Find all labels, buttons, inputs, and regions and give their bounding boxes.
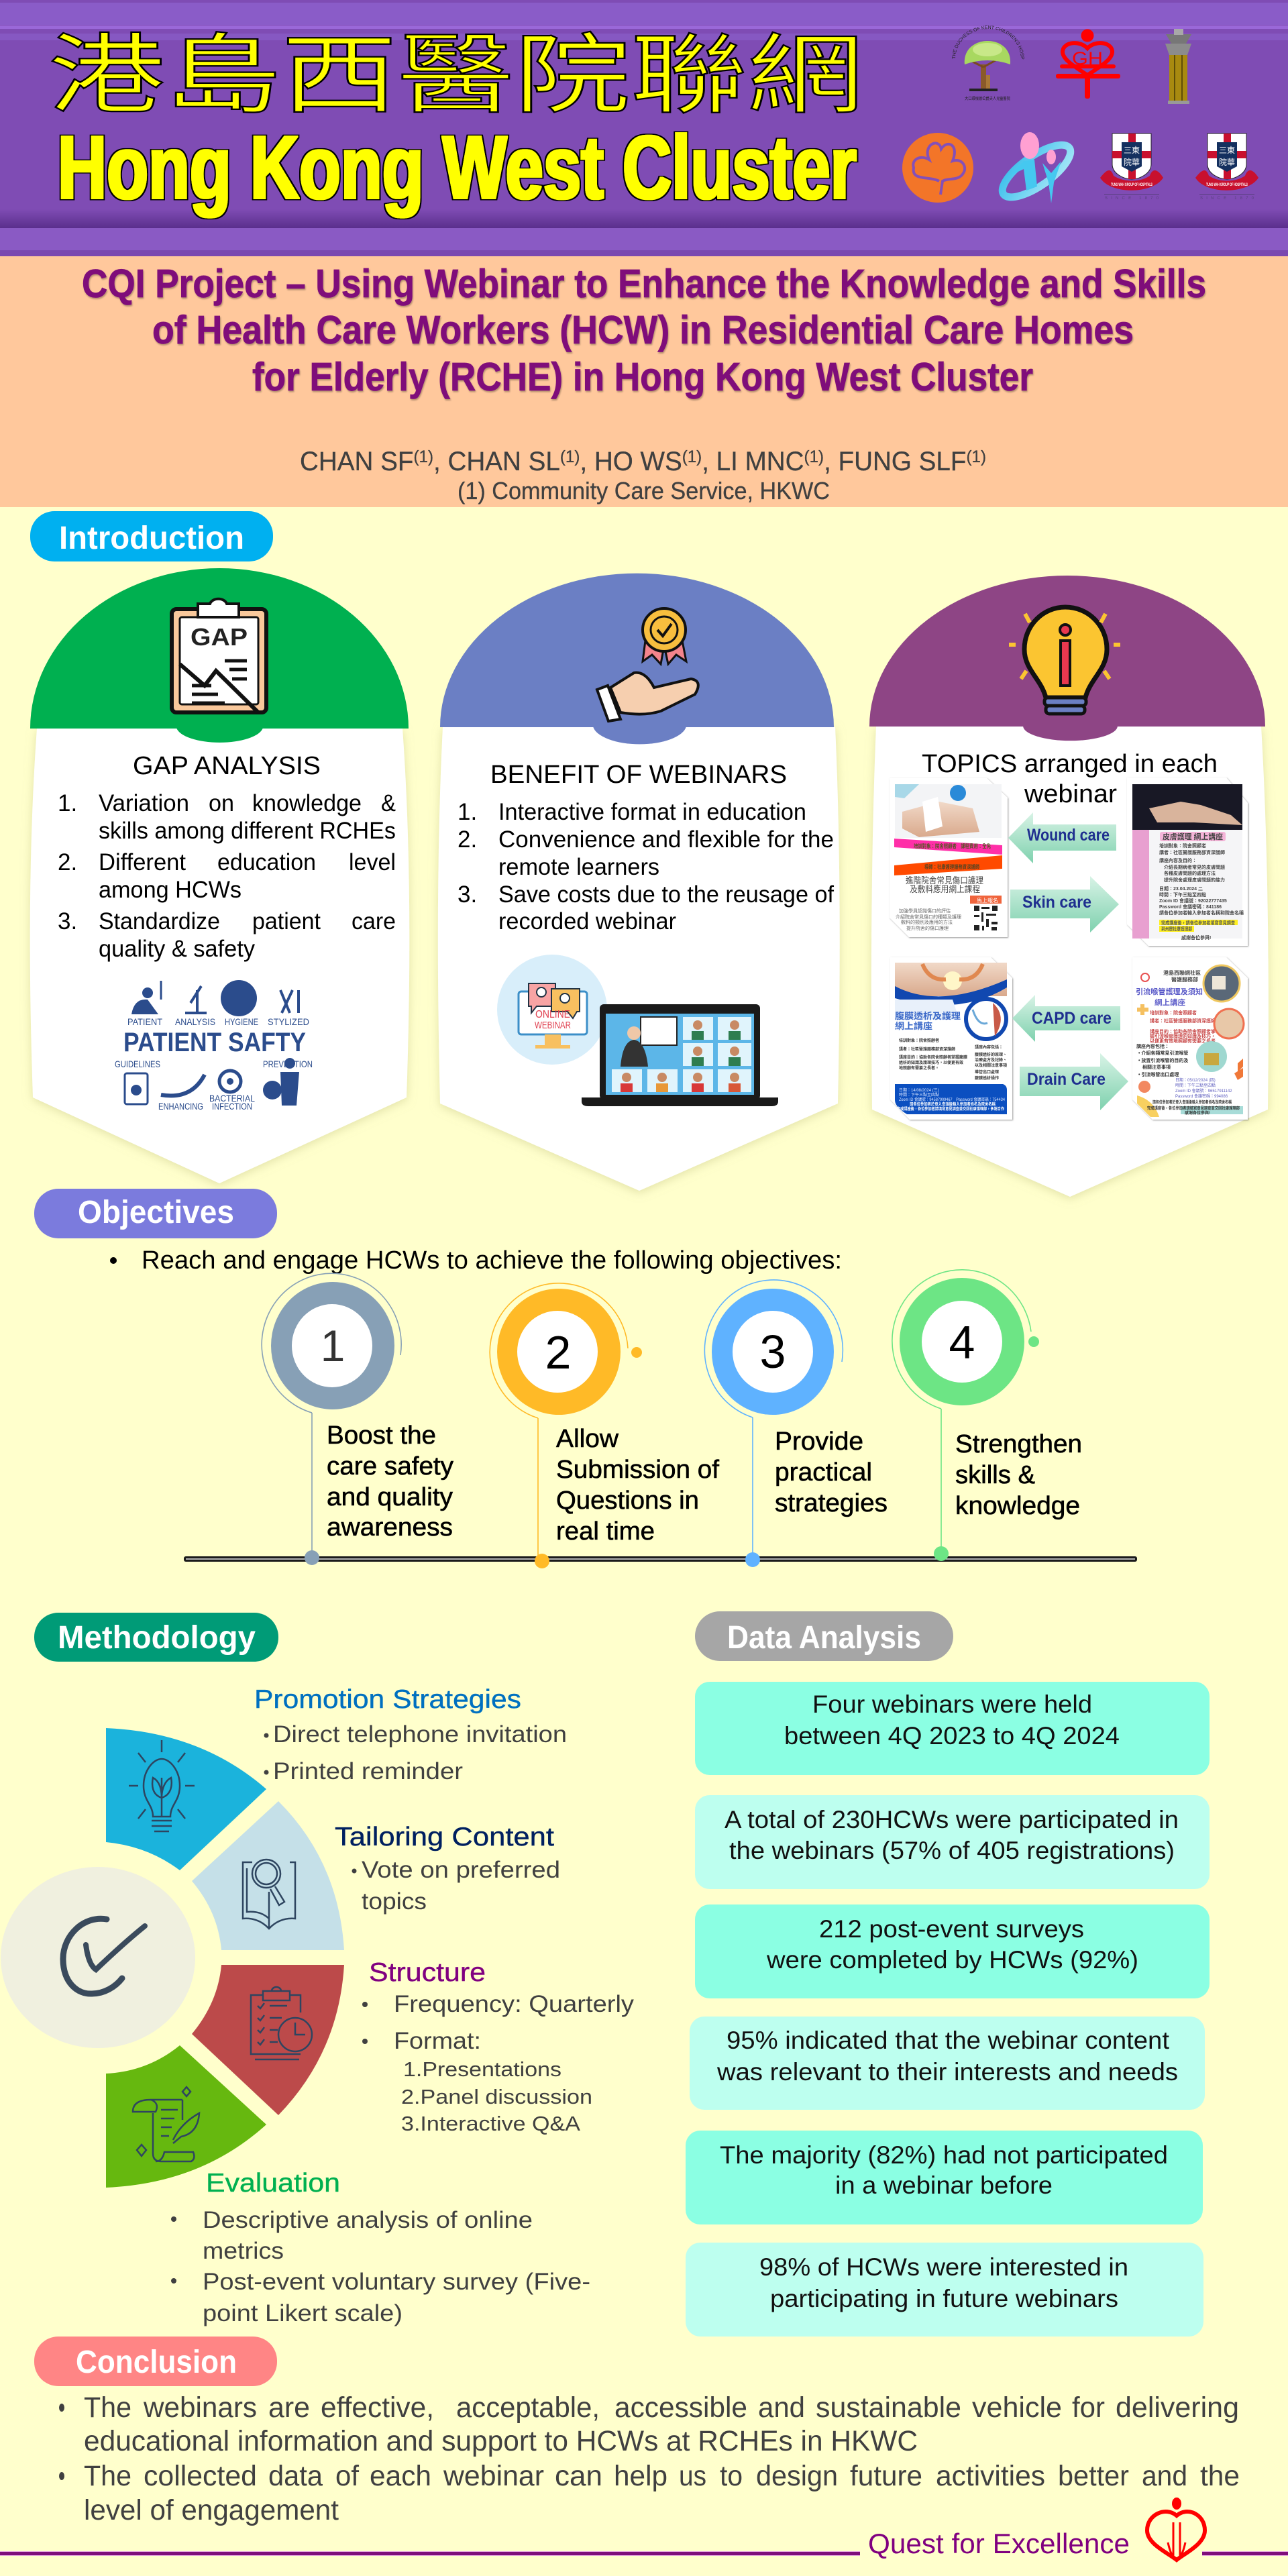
data box 6 [686, 2243, 1203, 2337]
heading: Objectives [34, 1189, 277, 1238]
authors: (1) [560, 447, 580, 466]
poster: drain care: 相關注意事項 [1142, 1064, 1171, 1070]
objective 1: and quality [327, 1483, 453, 1511]
logo: Tung Wah shield 1: SINCE 1870 [1105, 197, 1159, 201]
poster: drain care: 培訓對象：院舍照顧者 [1150, 1010, 1197, 1016]
poster: drain care: 完成講座後，各位參加者請填寫意見調查並交回社康護理部 [1147, 1106, 1240, 1111]
sector: tailoring [192, 1801, 344, 1950]
poster: skin care: 各種皮膚問題的處理方法 [1164, 870, 1216, 876]
data box 2: A total of 230HCWs were participated in [724, 1806, 1179, 1833]
authors: (1) [414, 447, 433, 466]
conclusion text: collected [144, 2460, 257, 2492]
logo: Tung Wah shield 1: 三東 [1124, 146, 1140, 155]
heading: Methodology [34, 1613, 278, 1662]
objective 4 [892, 1270, 1082, 1561]
poster: wound care: 培訓對象：院舍照顧者 課程費用：全免 [914, 843, 991, 849]
objective 1: 1 [321, 1321, 345, 1371]
poster: wound care: 及敷料應用網上課程 [910, 884, 980, 894]
data box 2 [695, 1795, 1210, 1889]
objective 1 [262, 1273, 453, 1565]
text: evaluation [171, 2169, 590, 2326]
conclusion text: better [1058, 2460, 1129, 2492]
poster: capd care: 網上講座 [895, 1021, 932, 1031]
gap analysis list: quality & safety [99, 936, 255, 962]
icon: gap clipboard [172, 599, 266, 712]
poster: drain care: 港島西聯網社區 [1163, 969, 1201, 976]
text: structure: 1.Presentations [403, 2057, 561, 2081]
logo: Duchess of Kent tree: 大口環根德公爵夫人兒童醫院 [965, 96, 1010, 101]
illustration: patient safety: STYLIZED [268, 1016, 309, 1027]
poster: capd care: 腹膜透析操作 [975, 1075, 999, 1081]
benefit list: 3. [458, 881, 477, 908]
poster: capd care: 完成講座後，各位參加者請填寫意見調查並交回社康護理部，多謝合作 [897, 1106, 1004, 1112]
poster: skin care: 完成講座後，請各位參加者填寫意見調查 [1161, 920, 1235, 926]
illustration: patient safety: PREVENTION [263, 1059, 313, 1069]
heading: topics: TOPICS arranged in each [922, 750, 1218, 778]
objective 2: 2 [545, 1326, 571, 1379]
data box 1: between 4Q 2023 to 4Q 2024 [784, 1722, 1120, 1750]
gap analysis list: Variation [99, 790, 189, 816]
footer slogan: Quest for Excellence [868, 2528, 1130, 2559]
poster: wound care: 提升院舍的傷口護理 [906, 925, 949, 931]
project title: for Elderly (RCHE) in Hong Kong West Cluster [252, 355, 1033, 399]
affiliation: (1) Community Care Service, HKWC [458, 477, 830, 504]
logo: Tung Wah shield 2: SINCE 1870 [1200, 197, 1254, 201]
conclusion text: each [370, 2460, 431, 2492]
text: tailoring content: Vote on preferred [362, 1857, 560, 1883]
text: promotion strategies [254, 1685, 567, 1784]
gap analysis list: 1. [58, 790, 77, 816]
data box 5: The majority (82%) had not participated [720, 2141, 1168, 2169]
poster: skin care: 講者：社區醫護服務部資深護師 [1159, 849, 1225, 855]
heading: Introduction: Introduction [59, 521, 244, 556]
illustration: patient safety [115, 980, 313, 1112]
poster: capd care: 日期：14/08/2024 (三) [899, 1087, 939, 1093]
poster: drain care: 請各位參加者於登入會議後輸入參加者姓名及院舍名稱 [1152, 1099, 1232, 1105]
text: evaluation: Evaluation [206, 2169, 340, 2198]
data box 6: participating in future webinars [770, 2285, 1118, 2312]
objective 3: practical [775, 1458, 872, 1487]
sector: promotion [106, 1728, 266, 1870]
text: evaluation: Descriptive analysis of online [203, 2207, 533, 2233]
authors: (1) [682, 447, 702, 466]
text: structure: 2.Panel discussion [401, 2085, 592, 2108]
objective 4: knowledge [955, 1492, 1080, 1520]
conclusion text: help [614, 2460, 667, 2492]
logo: Grantham Hospital [1056, 30, 1120, 99]
gap analysis list: Standardize [99, 908, 220, 934]
illustration: online webinar [497, 955, 778, 1106]
poster: capd care: 時間：下午三點至四點 [899, 1092, 939, 1097]
gap analysis list: care [352, 908, 396, 934]
project title: of Health Care Workers (HCW) in Residential Care Homes [152, 308, 1134, 352]
benefit list: recorded webinar [498, 908, 676, 934]
conclusion text: effective, [321, 2392, 434, 2424]
poster: drain care: 講座目的：協助各院舍照顧者掌 [1150, 1028, 1216, 1034]
panel: topics [869, 576, 1269, 1197]
chinese title: 港島西醫院聯網 [48, 26, 863, 124]
objective 4: 4 [949, 1316, 975, 1368]
text: tailoring content [335, 1823, 560, 1915]
heading: Introduction [30, 511, 273, 561]
conclusion text: webinar [443, 2460, 544, 2492]
benefit list: Interactive format in education [498, 799, 806, 825]
benefit list: 2. [458, 826, 477, 853]
gap analysis list: on [209, 790, 234, 816]
gap analysis list: Different [99, 849, 186, 875]
authors: (1) [966, 447, 986, 466]
poster: drain care: 醫護服務部 [1171, 976, 1198, 983]
project title [82, 262, 1206, 399]
poster: capd care: 講者：社區醫護服務部資深護師 [899, 1046, 955, 1052]
poster: skin care: 提升院舍處理皮膚問題的能力 [1164, 877, 1225, 883]
objective 4: skills & [955, 1461, 1035, 1489]
gap analysis list: 2. [58, 849, 77, 875]
text: structure [362, 1958, 635, 2135]
poster: skin care: 日期：23.04.2024 二 [1159, 885, 1203, 892]
poster: drain care [1132, 957, 1248, 1120]
data box 5: in a webinar before [835, 2171, 1053, 2199]
objective 4: Strengthen [955, 1430, 1082, 1458]
poster: skin care: 請各位參加者輸入參加者名稱和院舍名稱 [1159, 910, 1244, 916]
poster: drain care: Zoom ID 會議號：96517911142 [1175, 1088, 1232, 1093]
poster: skin care [1127, 777, 1248, 946]
poster: drain care: • 放置引流喉管的目的及 [1138, 1057, 1188, 1063]
conclusion text: and [758, 2392, 805, 2424]
poster: wound care: 介紹院舍常見傷口的種類及護理 [896, 914, 961, 920]
logo: Tung Wah shield 2: 三東 [1219, 146, 1235, 155]
text: evaluation: Post-event voluntary survey (Five- [203, 2269, 590, 2295]
poster: capd care: Zoom ID 會議號：94587909467 Password 會議密碼：754434 [899, 1097, 1006, 1102]
logo: Tung Wah shield 2 [1195, 133, 1258, 201]
poster: drain care: 網上講座 [1155, 998, 1185, 1007]
text: structure: Format: [394, 2028, 481, 2054]
objective 2: real time [556, 1517, 655, 1546]
data box 4: 95% indicated that the webinar content [727, 2027, 1170, 2054]
data box 3 [695, 1904, 1210, 1998]
poster: capd care: 導管出口處理 [975, 1069, 999, 1075]
poster: capd care: 培訓對象：院舍照顧者 [899, 1038, 939, 1043]
benefit list: 1. [458, 799, 477, 825]
methodology diagram [1, 1728, 344, 2188]
poster: wound care: 導師：社康護理服務資深護師 [924, 863, 979, 870]
objective 1: awareness [327, 1513, 453, 1542]
panel: topics: webinar [1024, 780, 1117, 808]
conclusion text: The [84, 2392, 131, 2424]
text: evaluation: metrics [203, 2238, 284, 2264]
authors: CHAN SF [300, 447, 418, 476]
logo: Duchess of Kent tree [952, 25, 1024, 101]
illustration: patient safety: ENHANCING [158, 1101, 203, 1112]
authors: , HO WS [580, 447, 682, 476]
footer rule [0, 2551, 1288, 2556]
icon: gap clipboard: GAP [191, 623, 248, 651]
project title panel [0, 256, 1288, 507]
logo: Grantham Hospital: GH [1072, 48, 1103, 68]
objective 2: Questions in [556, 1487, 699, 1515]
text: structure: 3.Interactive Q&A [401, 2112, 580, 2135]
illustration: patient safety: ANALYSIS [175, 1016, 215, 1027]
conclusion text: are [268, 2392, 310, 2424]
text: promotion strategies: Direct telephone invitation [273, 1721, 567, 1748]
objective 3: Provide [775, 1428, 863, 1456]
header banner [0, 0, 1288, 256]
poster: skin care: 講座內容及目的： [1159, 857, 1197, 863]
data box 4: was relevant to their interests and needs [716, 2058, 1178, 2086]
logo: caring figure [995, 132, 1078, 206]
data box 4 [690, 2017, 1205, 2110]
conclusion text: educational information and support to HCWs at RCHEs in HKWC [84, 2425, 918, 2457]
benefit list: Save costs due to the reusage of [498, 881, 834, 908]
poster: skin care: 介紹長期病者常見的皮膚問題 [1164, 864, 1225, 870]
objective 3 [704, 1280, 888, 1567]
arrow: skin care: Skin care [1022, 893, 1091, 912]
poster: wound care: 敷料的類別及應用的方法 [901, 919, 953, 925]
poster: drain care: 感謝各位參與! [1185, 1110, 1210, 1116]
conclusion text: can [555, 2460, 602, 2492]
gap analysis list: knowledge [252, 790, 362, 816]
objective 3: strategies [775, 1489, 888, 1517]
icon: hospital authority logo [1147, 2498, 1205, 2560]
arrow: skin care [1010, 876, 1119, 932]
panel: gap analysis [30, 568, 409, 1183]
text: structure: Structure [369, 1958, 486, 1987]
illustration: patient safety: GUIDELINES [115, 1059, 160, 1069]
poster: capd care: 腹膜透析及護理 [895, 1011, 961, 1021]
logo: Tung Wah shield 2: TUNG WAH GROUP OF HOSPITALS [1206, 183, 1248, 187]
poster: capd care [890, 957, 1012, 1120]
icon: medal and hand [597, 608, 698, 721]
heading: Objectives: Objectives [78, 1195, 234, 1230]
illustration: patient safety: PATIENT [127, 1016, 162, 1027]
illustration: patient safety: PATIENT SAFTY [123, 1028, 306, 1057]
poster: capd care: 講座內容包括： [975, 1044, 1003, 1050]
arrow: drain care [1020, 1053, 1128, 1110]
poster: drain care: • 引流喉管出口處理 [1138, 1071, 1179, 1077]
conclusion text: us [679, 2460, 706, 2492]
data box 5 [686, 2131, 1203, 2224]
poster: wound care: 加強學員認識傷口的評估 [899, 908, 951, 914]
objective 2: Allow [556, 1425, 619, 1453]
heading: Conclusion: Conclusion [76, 2345, 237, 2380]
data box 3: were completed by HCWs (92%) [766, 1946, 1138, 1974]
poster: skin care: 時間：下午三點至四點 [1159, 892, 1206, 898]
english title: Hong Kong West Cluster [58, 117, 857, 218]
poster: capd care: 以及相關注意事項 [975, 1063, 1007, 1068]
conclusion text: for [1072, 2392, 1105, 2424]
arrow: drain care: Drain Care [1027, 1070, 1106, 1089]
poster: capd care: 腹膜透析的原理、 [975, 1052, 1007, 1057]
poster: drain care: 講座內容包括： [1136, 1043, 1169, 1049]
poster: capd care: 講座目的：協助各院舍照顧者掌握腹膜 [899, 1055, 967, 1060]
heading: gap analysis: GAP ANALYSIS [133, 752, 321, 780]
text: promotion strategies: Printed reminder [273, 1758, 463, 1784]
poster: capd care: 透析的知識及護理技巧，以便更有效 [899, 1060, 963, 1065]
arrow: wound care [1008, 812, 1116, 863]
authors: , FUNG SLF [824, 447, 966, 476]
poster: drain care: 時間：下午三點至四點 [1175, 1083, 1216, 1088]
logo: tower [1165, 29, 1191, 104]
arrow: capd care: CAPD care [1032, 1009, 1112, 1028]
conclusion text: acceptable, [456, 2392, 600, 2424]
conclusion text: data [268, 2460, 323, 2492]
poster: capd care: 治療處方及記錄、 [975, 1057, 1007, 1063]
benefit list [458, 799, 834, 934]
logo: orange shamrock [902, 133, 973, 203]
data box 6: 98% of HCWs were interested in [759, 2253, 1128, 2281]
panel: benefit of webinars [438, 574, 840, 1191]
objective 2: Submission of [556, 1456, 719, 1484]
conclusion text: level of engagement [84, 2494, 339, 2526]
poster: drain care: Password 會議密碼：994086 [1175, 1093, 1228, 1099]
conclusion text: activities [936, 2460, 1045, 2492]
poster: drain care: • 介紹各類常見引流喉管 [1138, 1050, 1188, 1056]
gap analysis list: & [381, 790, 396, 816]
data box 1: Four webinars were held [812, 1690, 1092, 1718]
objective 3: 3 [760, 1326, 786, 1378]
gap analysis list: skills among different RCHEs [99, 818, 396, 844]
poster: wound care: 進階院舍常見傷口護理 [906, 875, 983, 885]
benefit list: remote learners [498, 854, 659, 880]
objectives timeline line [184, 1556, 1137, 1562]
gap analysis list: among HCWs [99, 877, 241, 903]
center check circle [1, 1867, 195, 2048]
text: structure: Frequency: Quarterly [394, 1991, 635, 2017]
objective 2 [490, 1283, 719, 1568]
illustration: patient safety: BACTERIAL [209, 1093, 255, 1104]
conclusion text: design [756, 2460, 838, 2492]
heading: Data Analysis: Data Analysis [727, 1620, 921, 1656]
conclusion text: future [850, 2460, 922, 2492]
icon: info light bulb [1009, 607, 1120, 714]
conclusion text [59, 2392, 1240, 2526]
heading: Conclusion [34, 2337, 277, 2386]
text: tailoring content: Tailoring Content [335, 1823, 554, 1851]
text: tailoring content: topics [362, 1888, 427, 1915]
poster: skin care: Password 會議密碼：841186 [1159, 904, 1222, 910]
conclusion text: webinars [143, 2392, 257, 2424]
conclusion text: of [335, 2460, 360, 2492]
gap analysis list: level [349, 849, 396, 875]
conclusion text: accessible [614, 2392, 747, 2424]
poster: skin care: Zoom ID 會議號：92022777435 [1159, 898, 1227, 904]
heading: Methodology: Methodology [58, 1620, 256, 1656]
poster: skin care: 培訓對象：院舍照顧者 [1159, 843, 1206, 849]
poster: drain care: 握引流喉管護理的知識及技巧， [1150, 1033, 1216, 1039]
illustration: patient safety: HYGIENE [225, 1016, 258, 1027]
illustration: online webinar: ONLINE [535, 1009, 570, 1020]
arrow: wound care: Wound care [1027, 826, 1110, 845]
poster: wound care [890, 778, 1008, 937]
poster: drain care: 講者：社區醫護服務部資深護師 [1150, 1018, 1216, 1024]
objective 1: Boost the [327, 1421, 436, 1450]
text: promotion strategies: Promotion Strategies [254, 1685, 521, 1714]
poster: capd care: 請各位參加者於登入會議後輸入參加者姓名及院舍名稱 [910, 1102, 996, 1107]
logo: Tung Wah shield 1: TUNG WAH GROUP OF HOSPITALS [1111, 183, 1152, 187]
poster: wound care: 馬上報名 [977, 897, 998, 904]
heading: Data Analysis [695, 1611, 953, 1661]
conclusion text: The [84, 2460, 131, 2492]
poster: capd care: 地照顧有需要之長者。 [899, 1065, 939, 1071]
poster: skin care: 皮膚護理 網上講座 [1163, 832, 1223, 841]
sector: evaluation [106, 2045, 266, 2188]
poster: skin care: 感謝各位參與! [1181, 934, 1211, 941]
gap analysis list: education [217, 849, 316, 875]
poster: drain care: 引流喉管護理及須知 [1136, 987, 1203, 996]
conclusion text: and [1142, 2460, 1187, 2492]
objective 1: care safety [327, 1452, 453, 1481]
gap analysis list: 3. [58, 908, 77, 934]
poster: drain care: 日期：05/12/2024 (四) [1175, 1077, 1216, 1083]
conclusion text: the [1200, 2460, 1240, 2492]
benefit list: Convenience and flexible for the [498, 826, 834, 853]
poster: drain care: 以便更有效地照顧有需要之長者 [1150, 1038, 1216, 1044]
logo: Tung Wah shield 1: 院華 [1124, 158, 1140, 167]
data box 2: the webinars (57% of 405 registrations) [729, 1837, 1175, 1864]
arrow: capd care [1012, 995, 1120, 1042]
conclusion text: to [720, 2460, 743, 2492]
data box 3: 212 post-event surveys [819, 1915, 1084, 1943]
poster: skin care: 到州層社康護理部 [1161, 926, 1192, 932]
illustration: patient safety: INFECTION [212, 1101, 252, 1112]
illustration: online webinar: WEBINAR [535, 1020, 571, 1031]
sector: structure [192, 1965, 344, 2115]
gap analysis list: patient [252, 908, 321, 934]
data box 1 [695, 1682, 1210, 1775]
text: evaluation: point Likert scale) [203, 2300, 402, 2326]
objectives intro text: Reach and engage HCWs to achieve the following objectives: [142, 1246, 842, 1275]
conclusion text: delivering [1116, 2392, 1239, 2424]
authors: , LI MNC [702, 447, 804, 476]
logo: Tung Wah shield 1 [1100, 133, 1163, 201]
authors: (1) [804, 447, 824, 466]
conclusion text: vehicle [972, 2392, 1062, 2424]
logo: Tung Wah shield 2: 院華 [1219, 158, 1235, 167]
heading: benefit of webinars: BENEFIT OF WEBINARS [490, 761, 787, 789]
gap analysis list [58, 790, 396, 962]
authors: , CHAN SL [433, 447, 560, 476]
conclusion text: sustainable [816, 2392, 961, 2424]
